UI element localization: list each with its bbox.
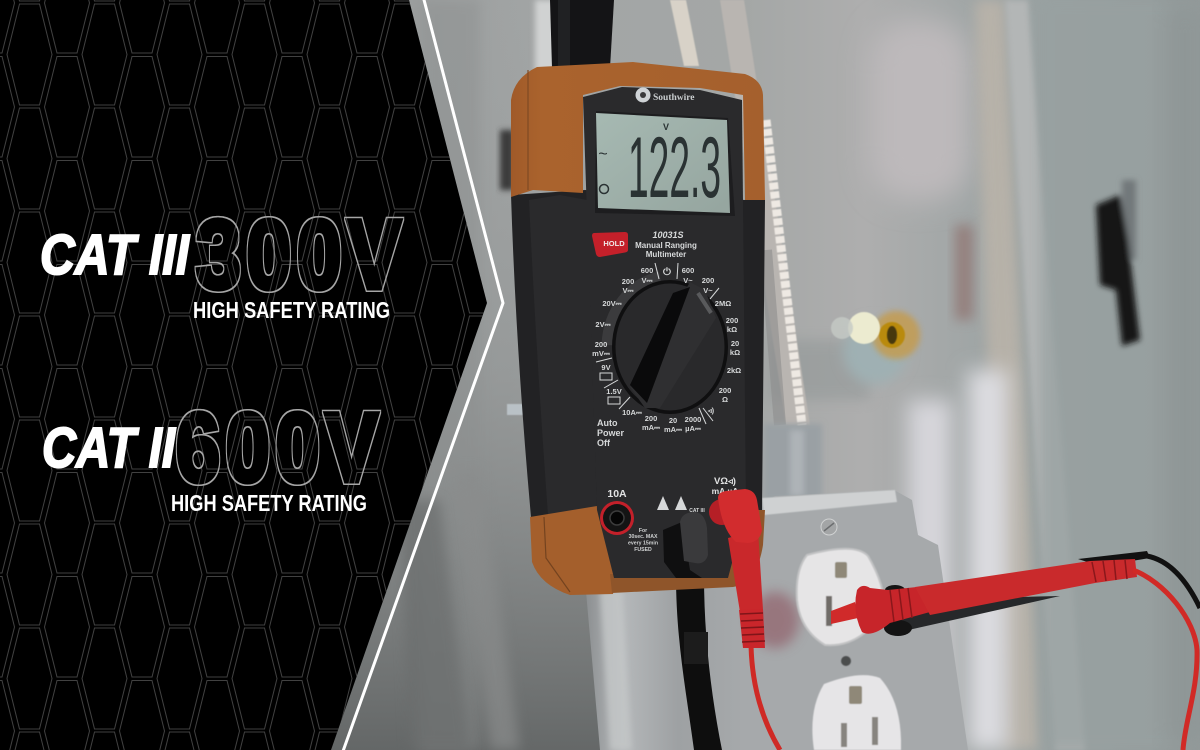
- dial scale labels: 600: [682, 266, 694, 275]
- rating: CAT III 300V: [40, 200, 407, 323]
- dial scale labels: 200: [595, 340, 607, 349]
- auto power off note: [597, 418, 625, 448]
- heading: CAT III: CAT III: [40, 223, 190, 287]
- dial scale labels: V⎓: [642, 276, 654, 285]
- V ohm socket label: mA µA: [712, 486, 738, 496]
- scale tick marks: [596, 263, 719, 424]
- dial scale labels: 2kΩ: [727, 366, 741, 375]
- rotary dial: [612, 280, 728, 414]
- dial scale labels: 2000: [685, 415, 701, 424]
- warning triangles: [657, 496, 705, 514]
- dial range arc: [607, 277, 660, 345]
- flexible metal conduit: [670, 0, 822, 500]
- dial scale labels: 20V⎓: [602, 299, 623, 308]
- icon: blurred black cabinet latch: [1096, 180, 1140, 346]
- 10A socket: 10A: [607, 488, 627, 500]
- rating: CAT II 600V: [42, 393, 384, 516]
- metal electrical box: [585, 580, 770, 750]
- caption: high safety rating: HIGH SAFETY RATING: [193, 297, 390, 323]
- warning triangles: CAT III: [689, 508, 705, 514]
- side rubber, black: [511, 190, 765, 530]
- dial scale labels: mV⎓: [592, 349, 611, 358]
- dial scale labels: ⏻: [663, 266, 671, 278]
- 10A socket: [600, 488, 634, 535]
- socket note: FUSED: [634, 547, 652, 553]
- dial scale labels: 10A⎓: [622, 408, 643, 417]
- lcd bezel: [595, 111, 735, 216]
- dial scale labels: mA⎓: [664, 425, 683, 434]
- dial scale labels: Ω: [722, 395, 728, 404]
- V ohm socket label: VΩ◃): [714, 476, 736, 487]
- socket note: For: [639, 528, 647, 534]
- dial scale labels: 20: [731, 339, 739, 348]
- dial scale labels: 600: [641, 266, 653, 275]
- logo: [636, 88, 695, 103]
- dial scale labels: 200: [645, 414, 657, 423]
- V ohm socket label: [712, 476, 738, 496]
- dial scale labels: kΩ: [727, 325, 737, 334]
- dial scale labels: 2V⎓: [595, 320, 612, 329]
- bottom orange bumper: [530, 506, 616, 595]
- dial scale labels: V⎓: [622, 286, 635, 295]
- outlet cover plate: [740, 490, 968, 750]
- dial scale labels: 200: [719, 386, 731, 395]
- lcd screen: [596, 113, 730, 213]
- red test probe in outlet: [831, 551, 1200, 750]
- dial scale labels: V~: [683, 276, 693, 285]
- strap: [550, 0, 614, 68]
- panel: black hexagon-pattern chevron: [0, 0, 500, 750]
- outlet: upper receptacle: [797, 549, 885, 645]
- socket note: every 15min: [628, 540, 658, 546]
- dial scale labels: kΩ: [730, 348, 740, 357]
- model name: 10031S: [652, 230, 684, 240]
- dial scale labels: µA⎓: [685, 424, 702, 433]
- red test lead, left plug and wire: [709, 489, 780, 750]
- heading: CAT II: CAT II: [42, 416, 176, 480]
- auto power off note: Power: [597, 428, 625, 438]
- dial scale labels: 200: [726, 316, 738, 325]
- auto power off note: Auto: [597, 418, 618, 428]
- outlet: lower receptacle: [812, 675, 901, 750]
- number: 600V outline: 600V: [176, 393, 384, 502]
- auto power off note: Off: [597, 438, 611, 448]
- hold button: [592, 232, 628, 257]
- number: 300V outline: 300V: [196, 200, 407, 309]
- test lead: black wire: [676, 575, 722, 750]
- multimeter body: [511, 62, 765, 595]
- white chevron line: [342, 0, 503, 750]
- front face: [583, 87, 746, 578]
- multimeter body: ~: [598, 146, 608, 163]
- multimeter body: 122.3: [628, 120, 721, 216]
- top orange shell: [511, 62, 765, 200]
- model name: [635, 230, 697, 259]
- dial scale labels: 2MΩ: [715, 299, 731, 308]
- multimeter body: V: [663, 122, 669, 132]
- hold button: HOLD: [603, 239, 625, 248]
- dial scale labels: [592, 266, 741, 434]
- dial scale labels: 200: [622, 277, 634, 286]
- dial scale labels: mA⎓: [642, 423, 661, 432]
- dial scale labels: 9V: [601, 363, 611, 372]
- dial scale labels: 1.5V: [606, 387, 622, 396]
- dial scale labels: ◃): [707, 406, 715, 415]
- model name: Manual Ranging: [635, 241, 697, 250]
- black test lead plug: [663, 512, 708, 578]
- socket note: [628, 528, 658, 553]
- dial scale labels: V~: [703, 286, 713, 295]
- dial scale labels: 20: [669, 416, 677, 425]
- model name: Multimeter: [646, 250, 686, 259]
- socket note: 30sec. MAX: [629, 534, 658, 540]
- dial scale labels: 200: [702, 276, 714, 285]
- icon: blurred yellow fitting: [831, 311, 920, 359]
- caption: high safety rating: HIGH SAFETY RATING: [171, 490, 367, 516]
- logo: Southwire: [653, 93, 695, 103]
